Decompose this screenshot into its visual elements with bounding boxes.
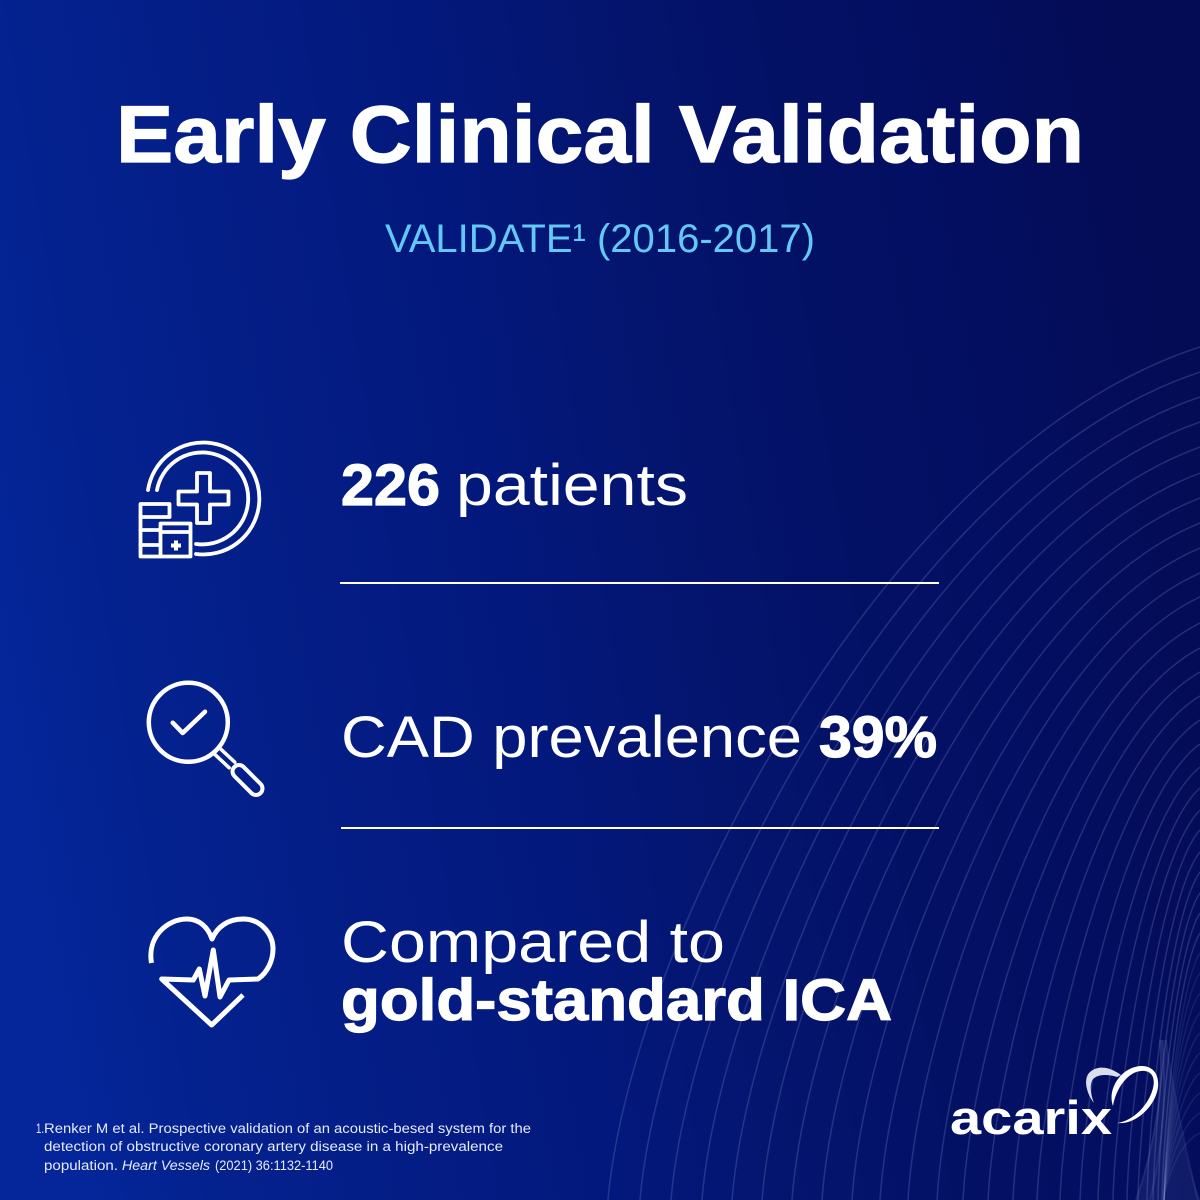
footnote: (2021) 36:1132-1140 [215,1158,333,1173]
footnote: 1. [36,1121,44,1136]
stat: CAD prevalence: CAD prevalence [341,705,802,770]
stat: patients: 226 [341,453,440,518]
stat: compared to gold-standard ICA: gold-standard ICA [341,968,892,1033]
title: Early Clinical Validation [116,90,1084,180]
icon: heart with pulse [151,919,273,1025]
footnote: Heart Vessels [122,1158,210,1173]
stat: compared to gold-standard ICA [341,910,892,1033]
icon: medical cross and records [140,442,259,556]
icon: magnifier with check [149,683,265,798]
footnote: population. [44,1158,118,1173]
stat: compared to gold-standard ICA: Compared to [341,910,725,975]
logo: acarix [950,1066,1158,1144]
footnote [36,1121,531,1173]
stat: CAD prevalence: 39% [819,705,937,770]
stat: patients [341,453,688,518]
footnote: Renker M et al. Prospective validation of an acoustic-besed system for the [44,1121,531,1136]
stat: patients: patients [456,453,688,518]
subtitle: VALIDATE¹ (2016-2017) [385,217,815,261]
logo: acarix: acarix [950,1091,1112,1144]
footnote: detection of obstructive coronary artery disease in a high-prevalence [44,1139,503,1154]
